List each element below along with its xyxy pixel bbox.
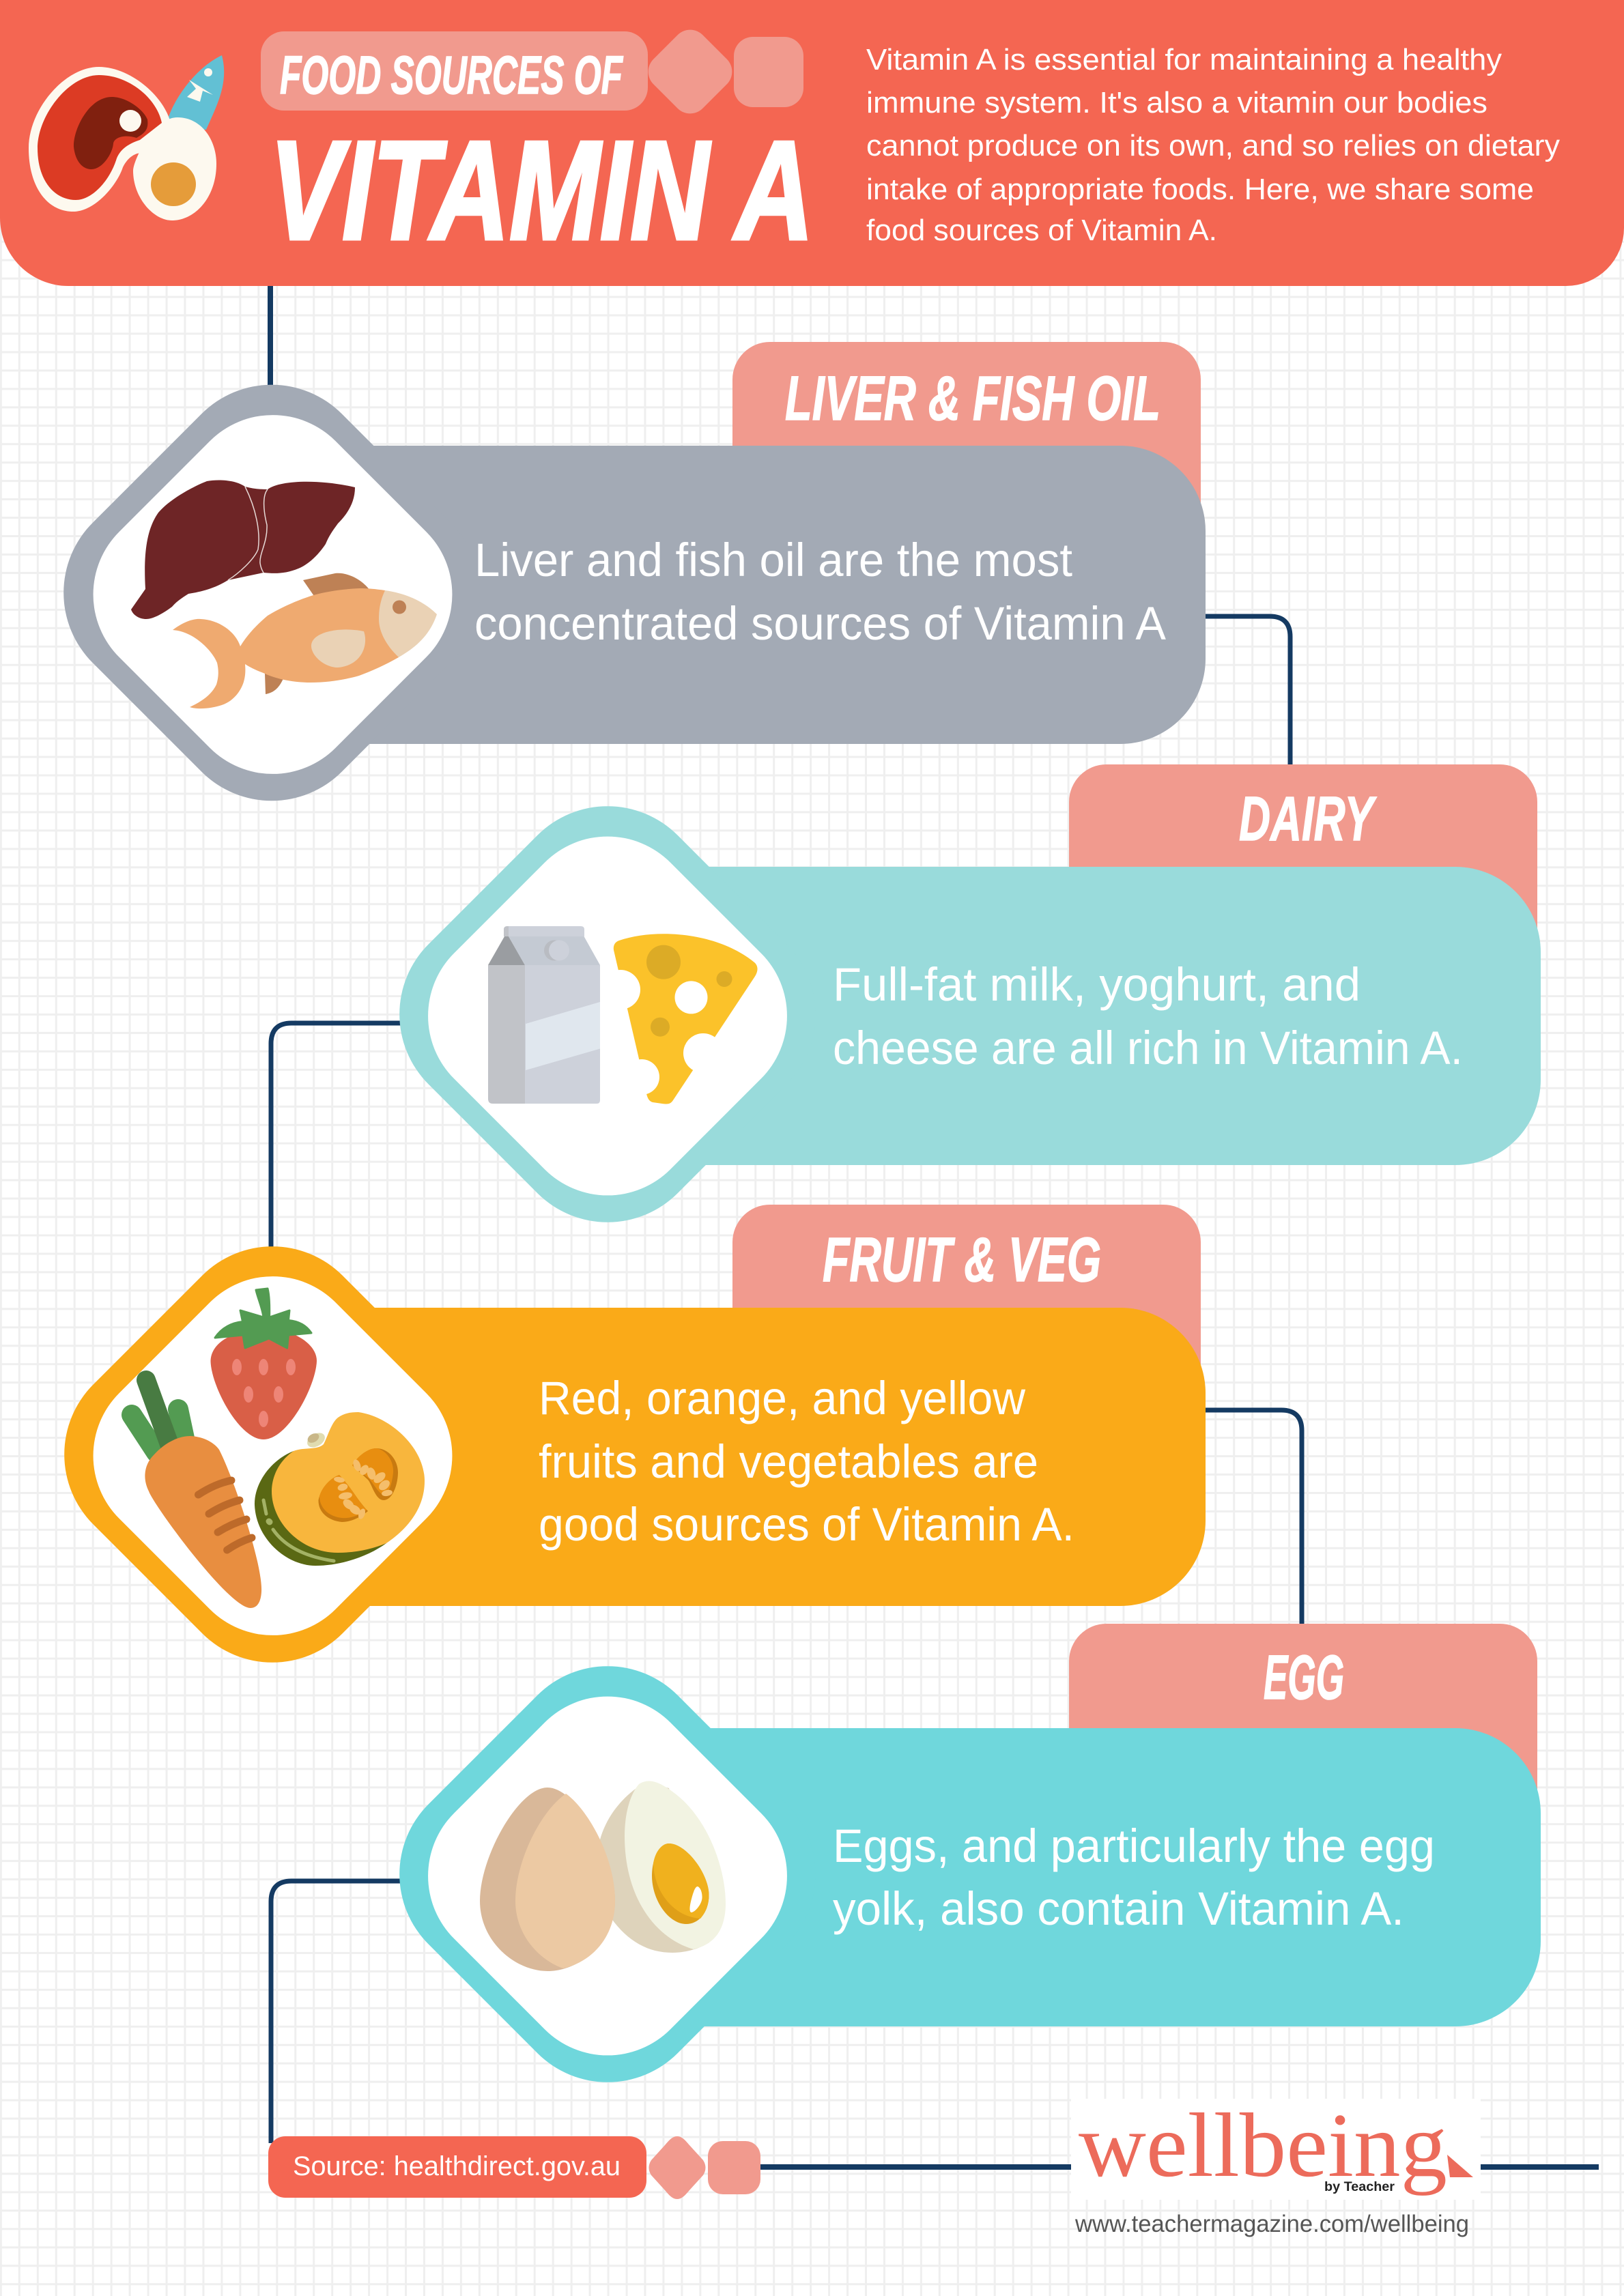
text card: fruit and veg: good sources of Vitamin A. <box>539 1498 1074 1551</box>
panel: fruit and veg <box>23 1205 1206 1704</box>
heading tab: dairy <box>1069 764 1537 969</box>
diamond frame: liver and fish oil <box>23 344 521 842</box>
title: VITAMIN A <box>270 112 814 269</box>
footer source pill: Source: healthdirect.gov.au <box>293 2151 621 2181</box>
wellbeing logo: wellbeing <box>1079 2095 1447 2196</box>
heading tab: liver and fish oil <box>732 342 1201 547</box>
connector lines <box>270 273 1599 2167</box>
decorative square <box>734 37 803 107</box>
heading tab: egg <box>1069 1624 1537 1828</box>
icon: fish <box>173 573 437 708</box>
heading tab: fruit and veg <box>732 1205 1201 1409</box>
icon: carrot <box>132 1380 261 1608</box>
panel: liver and fish oil <box>23 342 1206 842</box>
panel: egg <box>358 1624 1541 2123</box>
intro text: food sources of Vitamin A. <box>866 214 1217 247</box>
text card: egg <box>608 1728 1541 2026</box>
footer decorative square <box>708 2141 760 2194</box>
icon: whole egg <box>480 1788 615 1971</box>
diamond frame: fruit and veg <box>23 1205 522 1704</box>
text card: fruit and veg <box>273 1308 1206 1606</box>
intro text <box>866 43 1560 247</box>
diamond frame: egg <box>358 1625 857 2123</box>
panel: dairy <box>358 764 1541 1263</box>
text card: liver and fish oil: concentrated sources of Vitamin A <box>474 597 1166 650</box>
text card: dairy <box>608 867 1541 1165</box>
header banner <box>0 0 1624 286</box>
diamond frame: dairy <box>358 765 857 1263</box>
heading tab: dairy: DAIRY <box>1239 784 1377 854</box>
icon: milk carton <box>488 926 600 1104</box>
text card: egg: yolk, also contain Vitamin A. <box>833 1882 1404 1935</box>
text card: dairy: Full-fat milk, yoghurt, and <box>833 958 1361 1011</box>
text card: fruit and veg: fruits and vegetables are <box>539 1435 1038 1488</box>
wellbeing logo: by Teacher <box>1324 2180 1395 2194</box>
text card: fruit and veg: Red, orange, and yellow <box>539 1372 1025 1424</box>
icon: liver <box>131 480 355 619</box>
intro text: Vitamin A is essential for maintaining a healthy <box>866 43 1502 76</box>
intro text: immune system. It's also a vitamin our bodies <box>866 86 1487 119</box>
decorative diamond <box>641 23 739 121</box>
icon: steak, fish and egg <box>29 55 224 220</box>
intro text: cannot produce on its own, and so relies on dietary <box>866 129 1560 162</box>
intro text: intake of appropriate foods. Here, we share some <box>866 173 1534 206</box>
heading tab: fruit and veg: FRUIT & VEG <box>823 1225 1101 1295</box>
icon: strawberry <box>210 1289 317 1439</box>
subtitle pill: FOOD SOURCES OF <box>280 44 623 105</box>
website url: www.teachermagazine.com/wellbeing <box>1074 2211 1469 2237</box>
text card: egg: Eggs, and particularly the egg <box>833 1820 1435 1872</box>
heading tab: liver and fish oil: LIVER & FISH OIL <box>785 364 1160 433</box>
icon: cheese <box>601 934 758 1104</box>
footer source pill <box>268 2136 646 2198</box>
text card: liver and fish oil <box>273 446 1206 744</box>
icon: pumpkin <box>255 1412 425 1566</box>
icon: halved egg <box>599 1781 726 1953</box>
text card: liver and fish oil: Liver and fish oil are the most <box>474 534 1072 586</box>
text card: dairy: cheese are all rich in Vitamin A. <box>833 1022 1463 1074</box>
heading tab: egg: EGG <box>1264 1643 1344 1712</box>
footer decorative diamond <box>649 2136 706 2199</box>
subtitle pill <box>261 31 648 111</box>
